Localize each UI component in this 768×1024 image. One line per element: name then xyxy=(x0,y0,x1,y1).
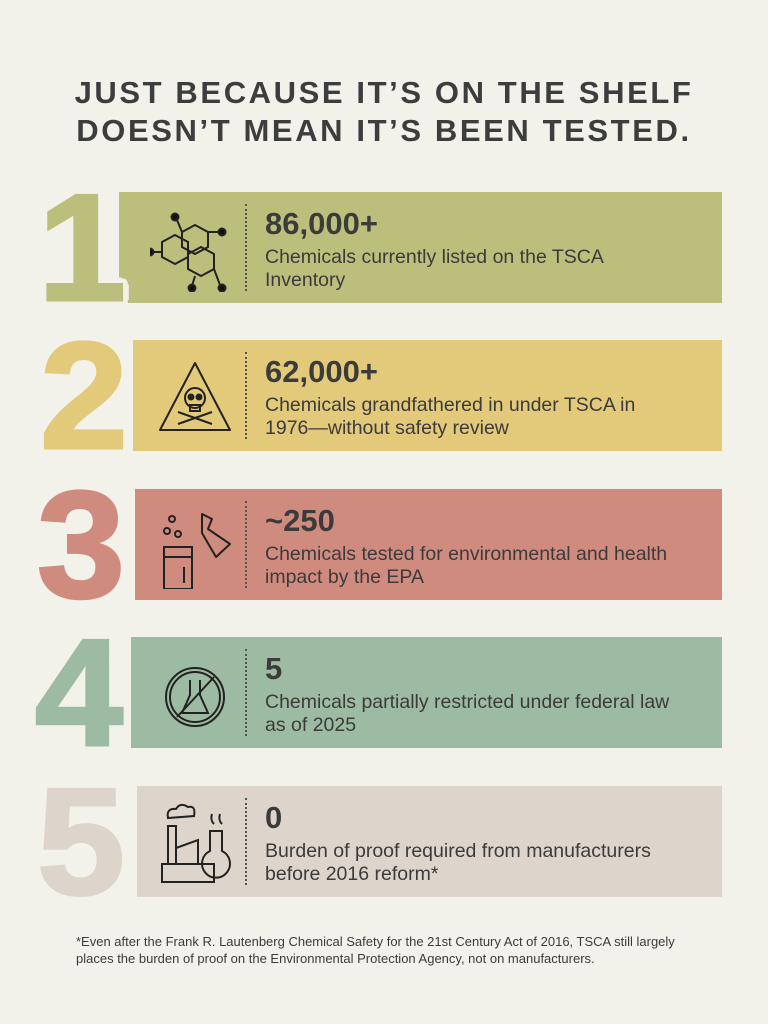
row 1 xyxy=(38,163,722,333)
title xyxy=(75,75,693,148)
number 3: 3 xyxy=(37,460,125,630)
row 1: 86,000+ xyxy=(265,206,378,241)
row 3: Chemicals tested for environmental and health impact by the EPA xyxy=(265,543,667,588)
number 4: 4 xyxy=(35,608,123,778)
row 2 xyxy=(40,311,722,481)
title: DOESN’T MEAN IT’S BEEN TESTED. xyxy=(76,113,692,148)
icon: prohibited flask xyxy=(165,667,225,727)
icon: skull warning xyxy=(159,362,231,431)
title: JUST BECAUSE IT’S ON THE SHELF xyxy=(75,75,693,110)
icon: lab glassware xyxy=(163,513,231,589)
number 5: 5 xyxy=(37,757,125,927)
row 2: Chemicals grandfathered in under TSCA in 1976—without safety review xyxy=(265,394,635,439)
row 4: Chemicals partially restricted under federal law as of 2025 xyxy=(265,691,669,736)
row 4: 5 xyxy=(265,651,282,686)
row 4 xyxy=(35,608,722,778)
row 2: 62,000+ xyxy=(265,354,378,389)
footnote: *Even after the Frank R. Lautenberg Chemical Safety for the 21st Century Act of 2016, TSCA still largely places the burden of proof on the Environmental Protection Agency, not on manufacturers. xyxy=(76,934,675,966)
number 1: 1 xyxy=(38,163,126,333)
row 1: Chemicals currently listed on the TSCA Inventory xyxy=(265,246,603,291)
row 3 xyxy=(37,460,722,630)
icon: molecule xyxy=(150,212,226,292)
row 5: Burden of proof required from manufacturers before 2016 reform* xyxy=(265,840,651,885)
icon: factory and flask xyxy=(161,804,231,883)
row 3: ~250 xyxy=(265,503,335,538)
number 2: 2 xyxy=(40,311,128,481)
row 5: 0 xyxy=(265,800,282,835)
row 5 xyxy=(37,757,722,927)
